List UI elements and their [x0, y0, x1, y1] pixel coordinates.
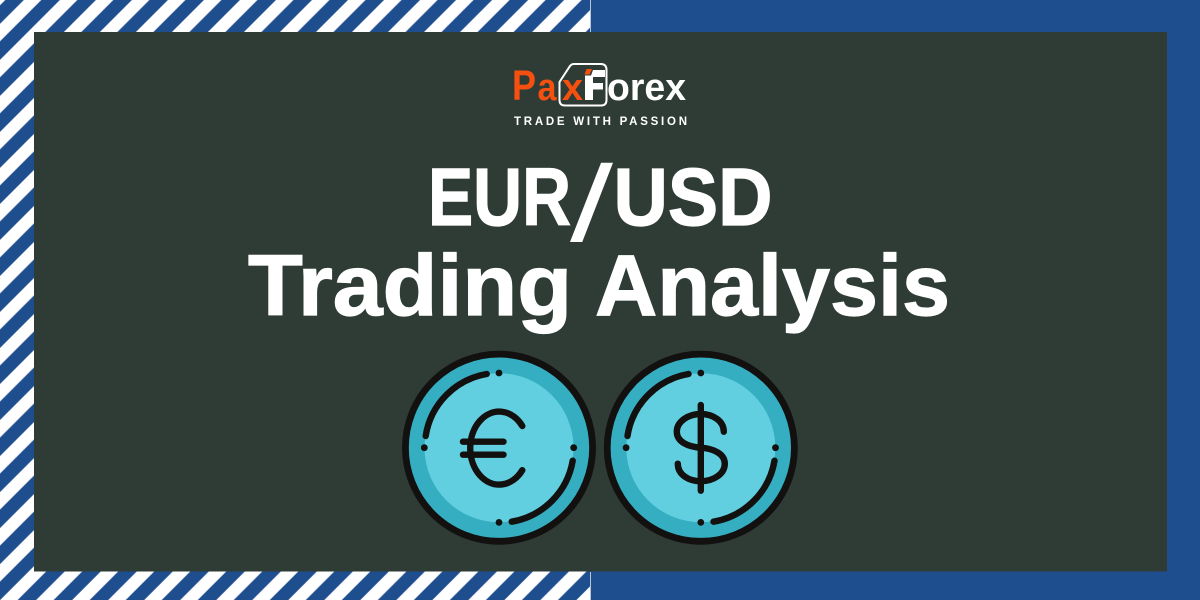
logo wordmark: a: [538, 67, 557, 109]
logo wordmark: orex: [607, 67, 686, 109]
title line 2: [248, 238, 950, 334]
icon: euro coin: [405, 354, 593, 541]
title line 1: /: [570, 143, 613, 264]
background: striped left block: [0, 0, 590, 600]
title line 1: [428, 143, 772, 264]
icon: dollar coin: [607, 354, 794, 541]
title line 1: USD: [614, 152, 772, 243]
title line 2: Trading: [248, 238, 572, 334]
logo: PaxForex: [512, 62, 687, 128]
title line 2: Analysis: [595, 238, 950, 334]
logo wordmark: x: [562, 67, 583, 109]
logo wordmark: P: [512, 62, 536, 110]
logo wordmark: [512, 62, 686, 110]
logo tagline: TRADE WITH PASSION: [514, 116, 687, 128]
title line 1: EUR: [428, 152, 571, 243]
background: solid blue right block: [590, 0, 1200, 600]
